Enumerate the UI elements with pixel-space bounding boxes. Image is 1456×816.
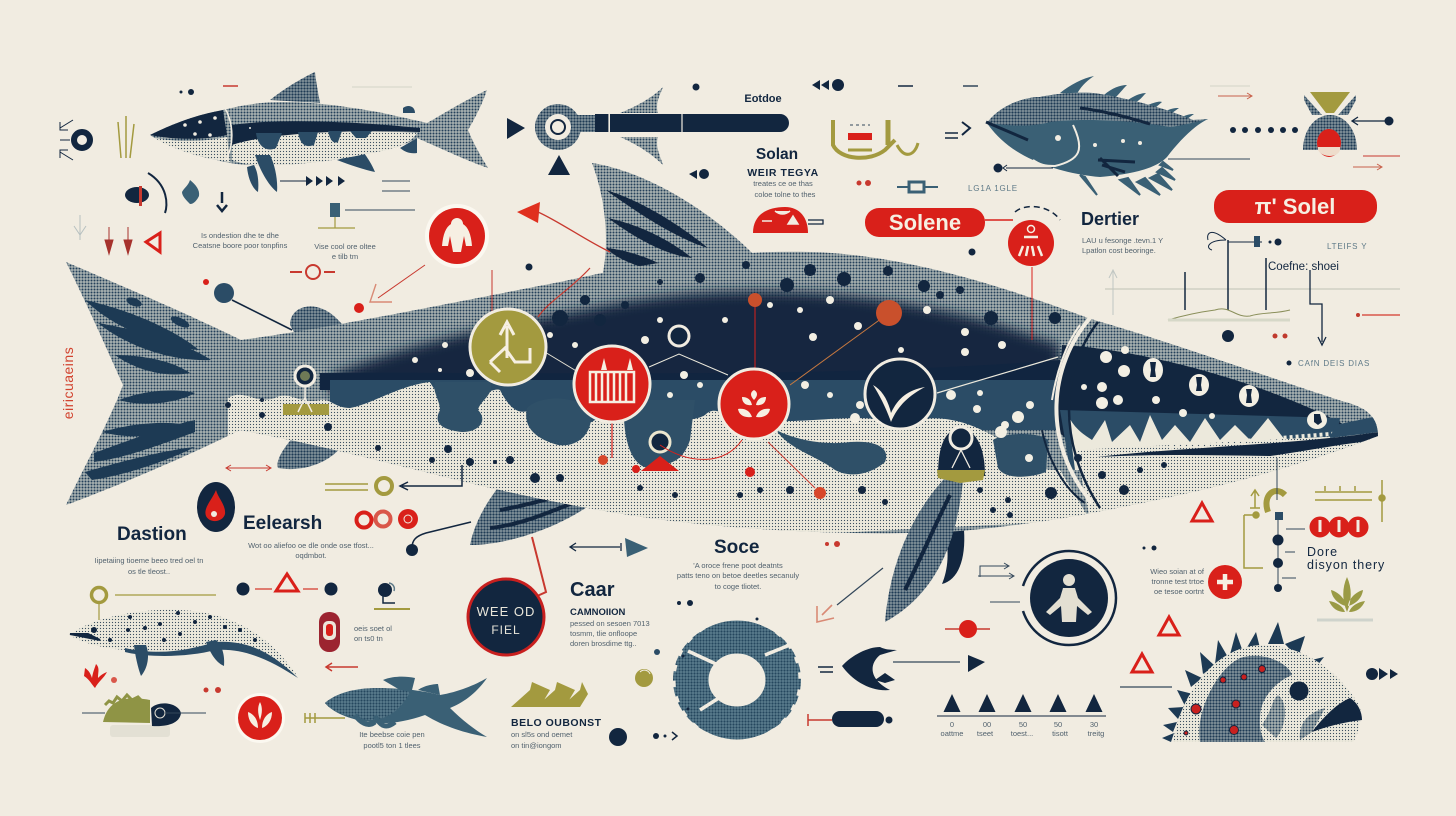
top-left fish [150, 72, 488, 192]
ear icon [374, 583, 410, 609]
top center key graphic [507, 87, 789, 175]
arrow chain [280, 176, 410, 191]
heading: Solan [747, 146, 819, 199]
heading: Dastion: Dastion [117, 524, 187, 545]
text: right labels: Coefne: shoei [1268, 261, 1339, 273]
callout: red leaf icon [719, 369, 789, 439]
red hat icon [753, 207, 823, 233]
upper dark band [330, 291, 1060, 395]
top right chart [1105, 232, 1400, 345]
marker: red base eye ring [632, 432, 679, 473]
heading: Eelearsh: oqdmbot. [295, 551, 327, 560]
back arrows and dot [692, 79, 913, 91]
callout: olive arrows icon [470, 309, 546, 385]
triangle scale [937, 694, 1106, 738]
red arrows top right [1210, 86, 1400, 170]
red chain icon [1310, 517, 1368, 537]
triangle scale: tisott [1052, 729, 1069, 738]
triangle scale: treitg [1088, 729, 1104, 738]
teal lower band [330, 380, 1060, 430]
red triangle pointer [517, 202, 610, 252]
top-right fish [986, 76, 1208, 195]
text: Dore: Dore [1307, 545, 1338, 559]
navy node column [1272, 458, 1305, 592]
red pill: Solel [1214, 190, 1377, 223]
text: right labels [1268, 242, 1370, 368]
text: shark caption: pootl5 ton 1 tlees [363, 741, 421, 750]
emblem top right [1303, 92, 1394, 157]
heading: Eelearsh [243, 513, 374, 560]
heading: Soce: 'A oroce frene poot deatnts [693, 561, 783, 570]
node triangle row [236, 574, 338, 596]
heading: Caar: doren brosdime ttg.. [570, 639, 637, 648]
text: BELO OUBONST [511, 717, 602, 750]
text: right labels: CAfN DEIS DIAS [1298, 359, 1370, 368]
triangle scale: 50 [1019, 720, 1027, 729]
text: top-left caption: Is ondestion dhe te dhe [201, 231, 279, 240]
olive schematic [1244, 480, 1385, 568]
olive grass [118, 116, 134, 158]
badge: WEE OD FIEL: FIEL [491, 623, 521, 637]
red leaf badge [235, 693, 285, 743]
mini dots [689, 169, 709, 179]
mid navy stripe [320, 360, 1060, 390]
triangle scale: toest... [1011, 729, 1033, 738]
dot chain [1230, 127, 1298, 133]
text: shark caption: Ite beebse coie pen [359, 730, 425, 739]
olive tick line [305, 713, 345, 723]
orange node dots [354, 293, 902, 499]
half-disc with arc [125, 173, 166, 213]
text: pill caption: oeis soet ol [354, 624, 392, 633]
badge: WEE OD FIEL [468, 579, 544, 655]
target icon with ticks [60, 120, 90, 160]
heading: Solan: coloe tolne to thes [755, 190, 816, 199]
text: small label: LG1A 1GLE [968, 184, 1018, 193]
connector lines [370, 265, 1058, 488]
small dark ventral fin [942, 530, 964, 584]
red emblem with dashed arc [1008, 207, 1060, 266]
red pill: Solene: Solene [889, 210, 961, 235]
text: plus caption: tronne test trtoe [1151, 577, 1204, 586]
small dots and dash [180, 86, 412, 95]
text: top-left caption: e tilb tm [332, 252, 358, 261]
dots near caption [677, 541, 840, 606]
lizard fish [70, 588, 298, 678]
key icon with line [318, 203, 415, 228]
main fish pectoral fin [885, 478, 963, 622]
spiky fish [1162, 622, 1362, 742]
teal gear [677, 618, 797, 735]
text: right labels: LTEIFS Y [1327, 242, 1367, 251]
head [1060, 336, 1378, 452]
main fish anal fin [277, 430, 345, 469]
text: plus caption: oe tesoe oortnt [1154, 587, 1205, 596]
heading: Caar [570, 579, 650, 648]
teal shark [325, 677, 487, 737]
heading: Caar: tosmm, tlie onfloope [570, 629, 637, 638]
olive ring connector [226, 465, 462, 494]
red triangles [1132, 503, 1212, 672]
text: BELO OUBONST: on sl5s ond oemet [511, 730, 573, 739]
triangle scale: 00 [983, 720, 991, 729]
cream belly [228, 382, 1090, 540]
heading: Solan: WEIR TEGYA [747, 167, 819, 179]
red pill: Solene [865, 208, 985, 237]
heading: Soce [677, 537, 799, 591]
lines from fish [962, 86, 1250, 172]
heading: Solan: treates ce oe thas [753, 179, 813, 188]
heading: Dertier: LAU u fesonge .tevn.1 Y [1082, 236, 1163, 245]
main fish dorsal fin [592, 163, 755, 292]
olive snail [635, 669, 653, 687]
text: BELO OUBONST: BELO OUBONST [511, 717, 602, 729]
callout: navy check icon [865, 359, 935, 429]
red pill: Solel: π' Solel [1255, 194, 1335, 219]
triangle scale: 50 [1054, 720, 1062, 729]
arrow sign [945, 133, 958, 138]
heading: Dertier: Lpatlon cost beoringe. [1082, 246, 1156, 255]
text: Dore [1307, 545, 1385, 572]
equals fish arrow [818, 647, 985, 690]
olive chevrons [511, 682, 588, 707]
triangle scale: 0 [950, 720, 954, 729]
red arrow [326, 663, 358, 671]
red plus badge [1208, 565, 1242, 599]
callout: red figure icon [425, 204, 489, 268]
heading: Caar: CAMNOIION [570, 607, 626, 618]
text: top-left caption: Ceatsne boore poor tonpfins [193, 241, 288, 250]
heading: Soce: Soce [714, 537, 759, 558]
gill arcs [1042, 318, 1100, 508]
text: plus caption: Wieo soian at of [1150, 567, 1205, 576]
turtle icon [82, 695, 206, 737]
text: top-left caption: Vise cool ore oltee [314, 242, 376, 251]
teal mini icon [182, 180, 199, 204]
chart dots [1222, 236, 1360, 342]
navy arrow marks [1366, 668, 1398, 680]
red link to badge [526, 537, 546, 601]
red coral [84, 664, 117, 688]
text: pill caption: on ts0 tn [354, 634, 383, 643]
black connector with dot [406, 522, 471, 556]
navy bar with handle [808, 711, 892, 727]
red pill icon [319, 612, 340, 652]
red triangle row [74, 215, 160, 254]
olive plant [1317, 577, 1373, 620]
main fish body [60, 240, 1390, 540]
line left of spiky fish [1120, 686, 1172, 688]
small connector row [856, 180, 938, 192]
heading: Solan: Solan [756, 146, 798, 163]
triangle scale: 30 [1090, 720, 1098, 729]
heading: Dastion [95, 524, 203, 576]
marker: tail eye ring [283, 366, 329, 415]
teardrop flame icon [197, 482, 235, 532]
main fish small rear dorsal fin [290, 306, 344, 336]
text: Dore: disyon thery [1307, 558, 1385, 572]
heading: Caar: Caar [570, 579, 615, 601]
swap arrows [978, 563, 1014, 579]
red dot with lines [945, 620, 990, 638]
head eyes [1150, 362, 1322, 425]
text: top label: Eotdoe [744, 93, 782, 105]
badge: WEE OD FIEL: WEE OD [477, 604, 535, 619]
triangle scale: tseet [977, 729, 994, 738]
callout: red fence icon [574, 346, 650, 422]
text: BELO OUBONST: on tin@iongom [511, 741, 562, 750]
teal blotches [434, 388, 490, 432]
double arrow with teal triangle [570, 538, 648, 557]
marker: belly eye ring [937, 427, 985, 483]
text: pill caption [354, 624, 392, 643]
red mini arrow line [817, 568, 883, 622]
navy dot with arrow [609, 728, 677, 746]
heading: Dastion: os tle tleost.. [128, 567, 170, 576]
big person badge [990, 551, 1116, 645]
marker: upper eye ring [669, 326, 689, 346]
olive mechanism icon [833, 120, 918, 158]
red dot pair [204, 687, 221, 693]
text: shark caption [359, 730, 425, 750]
tail stripes [85, 300, 211, 374]
heading: Dertier: Dertier [1081, 209, 1139, 229]
vertical red label: eiricuaeins [60, 347, 76, 419]
float icon with line [203, 279, 292, 330]
heading: Soce: patts teno on betoe deetles secanuly [677, 571, 799, 580]
main fish ventral fin [470, 474, 605, 545]
red ring marker [290, 265, 335, 279]
heading: Dastion: Iipetaiing tioeme beeo tred oel tn [95, 556, 203, 565]
body spots [225, 261, 1167, 518]
black down arrow [217, 192, 227, 211]
red ring row [356, 509, 418, 529]
heading: Eelearsh: Wot oo aliefoo oe dle onde ose tfost... [248, 541, 374, 550]
heading: Eelearsh: Eelearsh [243, 513, 322, 534]
text: plus caption [1142, 546, 1205, 596]
text: top-left caption [193, 231, 376, 261]
triangle scale: oattme [941, 729, 963, 738]
heading: Soce: to coge tliotet. [715, 582, 761, 591]
heading: Caar: pessed on sesoen 7013 [570, 619, 650, 628]
heading: Dertier [1081, 209, 1163, 255]
